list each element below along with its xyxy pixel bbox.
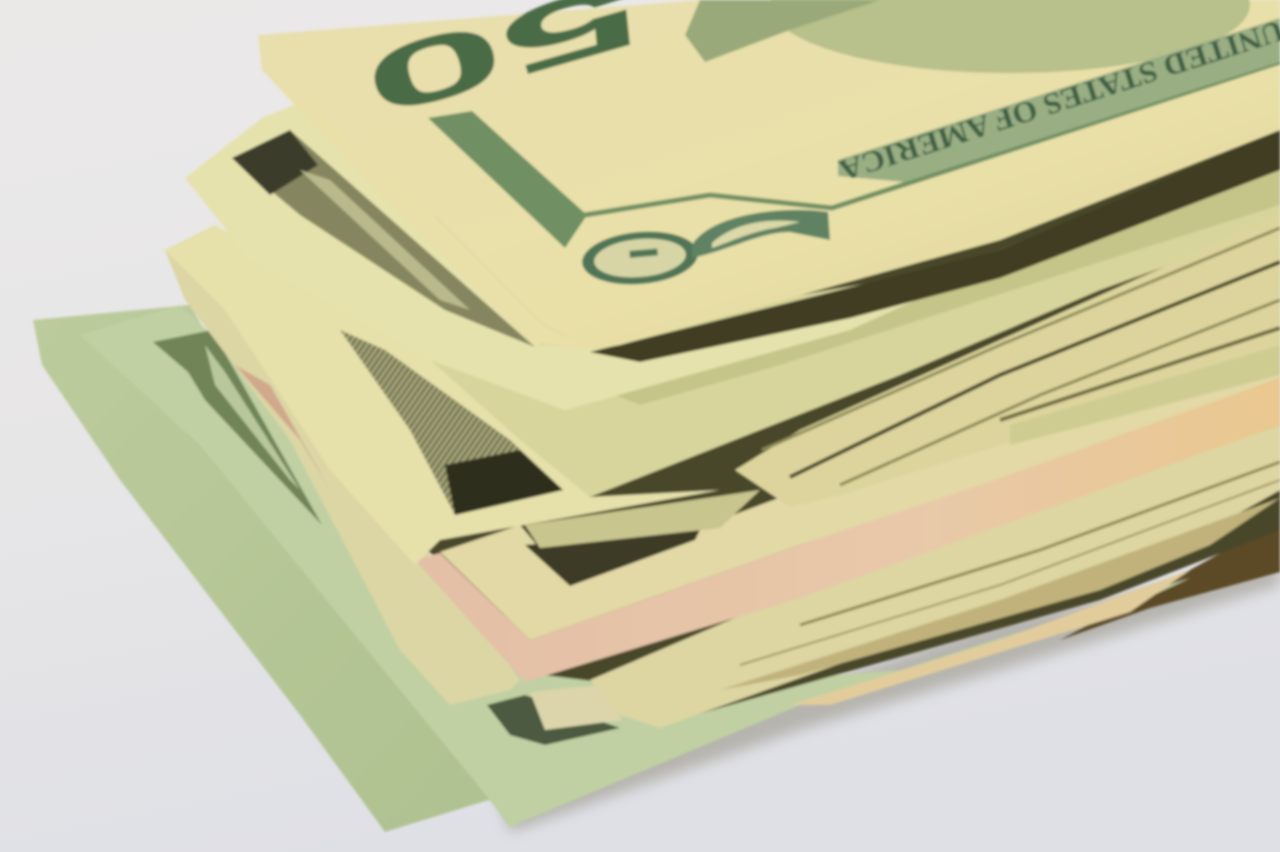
- gap shadow under top bill: [590, 130, 1280, 362]
- green border frame: [428, 18, 1280, 248]
- yellow sheet above pink: [440, 335, 1280, 640]
- stack core shadow: [300, 130, 1280, 725]
- pink bill: [415, 378, 1280, 682]
- engraved dark print: [340, 330, 563, 515]
- lower right sheets: [590, 425, 1280, 728]
- second green bill: [80, 305, 1190, 827]
- fanned sheets at right: [735, 215, 1280, 507]
- green bill corner print: [487, 695, 620, 745]
- dark print in the gap: [525, 530, 700, 586]
- green bill print: [153, 330, 322, 525]
- main wavy sheet: [430, 170, 1280, 497]
- cream bill on the left edge: [165, 225, 520, 705]
- cast shadow under the stack: [500, 565, 1280, 832]
- banner text: UNITED STATES OF AMERICA: [835, 13, 1280, 187]
- bottom green bill: [33, 305, 525, 832]
- bill edge fold: [248, 55, 590, 350]
- small corner numeral: [580, 210, 830, 289]
- green seal area: [770, 0, 1250, 73]
- middle cream bill with dark print: [165, 225, 720, 565]
- peach bottom sheet: [790, 570, 1190, 705]
- engraved hatch at top: [685, 0, 880, 62]
- second bill with dark portrait print: [185, 90, 1280, 410]
- dark shadow at the back right of the stack: [1060, 520, 1280, 640]
- top $50 bill: [248, 0, 1280, 350]
